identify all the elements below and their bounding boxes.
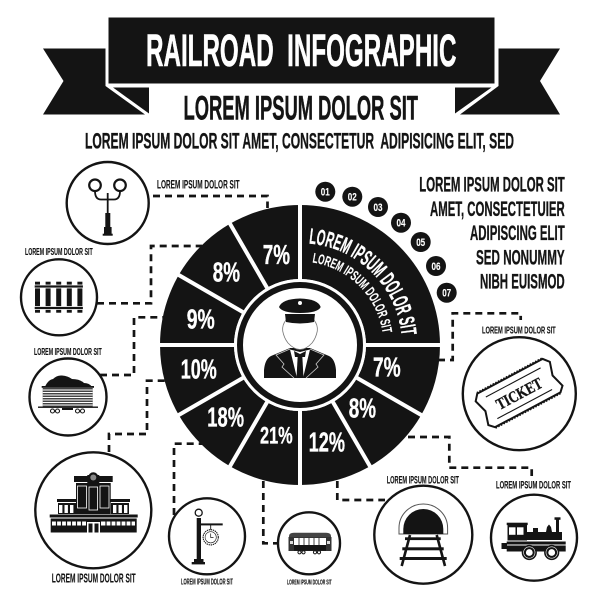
icon: lamp	[67, 162, 149, 244]
connector: locomotive	[408, 437, 532, 476]
label: passenger car: LOREM IPSUM DOLOR SIT	[287, 579, 332, 586]
icon: station	[35, 452, 151, 568]
connector: station	[109, 381, 166, 452]
connector: tunnel	[337, 481, 385, 500]
label: clock: LOREM IPSUM DOLOR SIT	[181, 578, 233, 587]
icon: tunnel	[374, 486, 472, 584]
number badges	[315, 182, 457, 303]
percent: 21%: 21%	[260, 422, 293, 450]
icon: clock	[169, 498, 245, 574]
label: lamp: LOREM IPSUM DOLOR SIT	[157, 179, 240, 191]
percent: 8% upper: 8%	[213, 257, 240, 288]
icon: coal wagon	[30, 358, 106, 436]
curved heading: LOREM IPSUM DOLOR SIT	[312, 252, 392, 332]
label: tunnel: LOREM IPSUM DOLOR SIT	[387, 474, 459, 486]
curved heading: LOREM IPSUM DOLOR SIT	[309, 228, 417, 334]
icon: conductor	[264, 298, 336, 378]
number badges: 05	[416, 237, 425, 249]
percent: 12%: 12%	[309, 427, 345, 458]
label: track: LOREM IPSUM DOLOR SIT	[25, 246, 93, 258]
icon: passenger car	[278, 512, 340, 574]
donut chart	[157, 202, 443, 488]
connector: ticket	[438, 313, 521, 360]
icon: ticket: TICKET	[493, 375, 546, 414]
right text block	[419, 174, 565, 293]
icon: ticket	[463, 337, 576, 450]
label: coal wagon: LOREM IPSUM DOLOR SIT	[34, 346, 102, 358]
connector: lamp	[153, 196, 268, 208]
connector: track	[97, 246, 202, 303]
title banner	[43, 18, 560, 114]
percent: 7% top: 7%	[263, 239, 290, 270]
percent: 18%: 18%	[207, 402, 244, 433]
number badges: 03	[374, 202, 382, 214]
percent: 8% lower: 8%	[349, 393, 376, 424]
number badges: 06	[432, 261, 440, 273]
connector: clock	[174, 444, 204, 515]
number badges: 07	[442, 288, 451, 300]
number badges: 01	[321, 186, 330, 198]
number badges: 02	[348, 192, 357, 204]
icon: locomotive	[491, 495, 577, 581]
percent: 9%: 9%	[187, 303, 215, 334]
icon: track	[21, 259, 97, 335]
connector: passenger car	[263, 481, 278, 543]
connector: coal wagon	[100, 317, 165, 375]
percent: 7% right: 7%	[373, 352, 401, 383]
number badges: 04	[396, 218, 406, 230]
label: station: LOREM IPSUM DOLOR SIT	[52, 571, 136, 585]
percent: 10%: 10%	[181, 353, 217, 384]
